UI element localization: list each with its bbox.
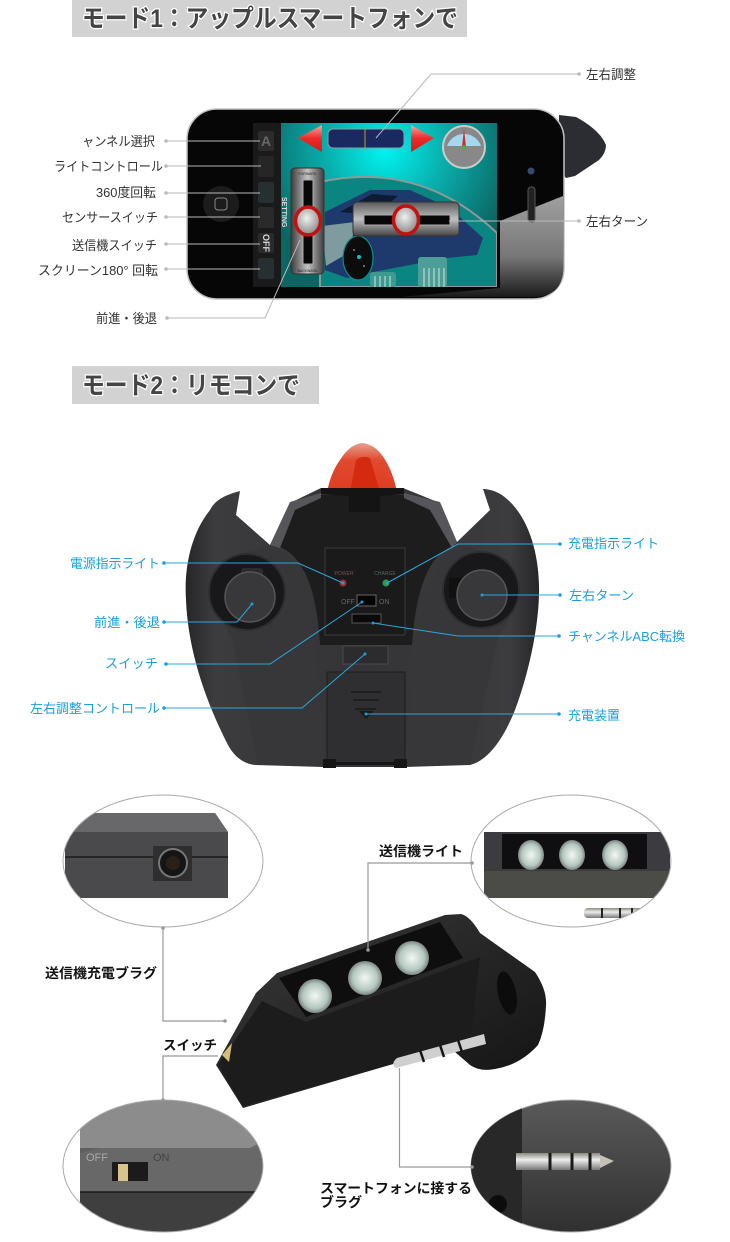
labels: mode 1: センサースイッチ — [62, 210, 158, 225]
horizontal slider — [353, 202, 459, 236]
button light — [258, 156, 274, 177]
left inner lobe — [215, 545, 325, 765]
power led — [340, 580, 346, 586]
left joystick base — [209, 554, 285, 630]
car wheel — [343, 236, 373, 280]
callout: switch close-up: OFF — [86, 1152, 108, 1164]
labels: mode 1: ライトコントロール — [54, 159, 163, 174]
button rotate — [258, 258, 274, 279]
labels: device: ブラグ — [320, 1194, 363, 1210]
left joystick housing — [241, 568, 263, 586]
device front shade — [218, 957, 480, 1106]
car window — [340, 194, 398, 215]
dark top section — [274, 495, 456, 645]
button off — [258, 233, 274, 253]
labels: mode 1: 左右調整 — [586, 67, 636, 82]
home button — [203, 186, 239, 222]
labels: mode 2: 前進・後退 — [94, 615, 160, 630]
LED 1 — [298, 979, 332, 1013]
labels: device: スイッチ — [163, 1038, 217, 1053]
panel: remote controller — [186, 443, 539, 768]
display panel — [325, 548, 405, 635]
LED 3 — [395, 941, 429, 975]
right inner lobe — [405, 545, 515, 765]
vertical slider — [291, 168, 324, 274]
right joystick housing — [449, 578, 461, 598]
on label: ON — [379, 599, 390, 606]
leader lines: device — [161, 861, 474, 1169]
right joystick base — [443, 552, 519, 628]
phone gloss reflection — [400, 196, 563, 297]
door ridges — [351, 692, 381, 709]
callout: switch close-up: ON — [153, 1152, 170, 1164]
gauge — [443, 126, 485, 168]
camera — [528, 168, 534, 174]
charge led — [382, 580, 390, 586]
top ridge — [321, 488, 404, 512]
button off: OFF — [261, 234, 271, 252]
remote body — [186, 488, 539, 767]
panel: transmitter device — [216, 914, 546, 1108]
leader lines: mode 1 — [164, 72, 581, 320]
vertical slider: BACKWARD — [297, 269, 318, 273]
device side hole — [494, 970, 520, 1016]
home button square — [215, 198, 227, 210]
heading: mode 1 — [72, 0, 467, 37]
callout: switch close-up — [63, 1100, 265, 1233]
car — [325, 190, 483, 278]
setting tab: SETTING — [280, 197, 287, 228]
vertical slider: FORWARD — [299, 172, 317, 176]
right arrow — [411, 125, 434, 152]
button sensor — [258, 207, 274, 228]
labels: mode 2: 左右調整コントロール — [30, 701, 160, 716]
speaker slot — [528, 187, 535, 222]
pedal small — [370, 272, 396, 287]
trim centre — [364, 129, 366, 148]
trim bar — [328, 129, 404, 148]
labels: device: スマートフォンに接する — [320, 1180, 472, 1196]
LED 2 — [348, 961, 382, 995]
labels: mode 2: 左右ターン — [569, 588, 634, 603]
phone body — [187, 109, 564, 299]
beacon inner — [350, 457, 380, 492]
channel switch — [352, 614, 381, 623]
leader lines: mode 2 — [162, 542, 562, 716]
LED recess — [279, 922, 463, 1017]
right top plate — [404, 493, 457, 548]
labels: device: 送信機充電ブラグ — [45, 965, 158, 981]
left joystick knob — [225, 572, 275, 622]
power label: POWER — [335, 571, 354, 577]
button 360 — [258, 182, 274, 203]
door arrow — [359, 711, 374, 719]
callout: LED close-up — [471, 795, 671, 927]
labels: mode 1: 前進・後退 — [96, 311, 157, 326]
left arrow — [298, 125, 322, 152]
labels: device — [45, 843, 472, 1210]
battery door — [327, 672, 405, 763]
labels: mode 1: 左右ターン — [586, 214, 648, 229]
app screen — [281, 123, 497, 287]
arc over car — [320, 177, 497, 287]
callout: charging port close-up — [63, 795, 263, 927]
labels: mode 2: 充電指示ライト — [568, 536, 659, 551]
power switch — [357, 595, 376, 606]
left top plate — [270, 493, 321, 548]
callout: plug close-up — [470, 1100, 671, 1234]
button A: A — [261, 133, 271, 149]
heading: mode 1: モード1：アップルスマートフォンで — [82, 5, 458, 33]
device body — [216, 914, 546, 1108]
pedal large — [418, 257, 447, 287]
red beacon — [327, 443, 397, 492]
labels: device: 送信機ライト — [379, 843, 463, 859]
labels: mode 1: 送信機スイッチ — [72, 238, 157, 253]
audio plug — [393, 1034, 486, 1068]
trim switch — [343, 646, 388, 664]
heading: mode 2: モード2：リモコンで — [82, 372, 300, 400]
icon: attached transmitter on phone — [559, 115, 606, 178]
button A — [258, 131, 274, 151]
labels: mode 1: ャンネル選択 — [82, 134, 155, 149]
labels: mode 2: チャンネルABC転換 — [568, 629, 685, 644]
door feet — [323, 759, 407, 768]
panel: smartphone illustration — [187, 109, 606, 299]
off label: OFF — [341, 599, 355, 606]
labels: mode 1 — [38, 67, 648, 326]
charge label: CHARGE — [374, 571, 396, 577]
right joystick knob — [457, 570, 507, 620]
labels: mode 2: スイッチ — [105, 656, 158, 671]
labels: mode 2 — [30, 536, 685, 723]
side switch — [222, 1043, 232, 1062]
labels: mode 1: 360度回転 — [96, 185, 156, 200]
labels: mode 1: スクリーン180° 回転 — [38, 263, 158, 278]
labels: mode 2: 充電装置 — [568, 708, 620, 723]
labels: mode 2: 電源指示ライト — [70, 556, 160, 571]
car lower grey — [324, 222, 353, 266]
left button strip — [253, 123, 281, 287]
